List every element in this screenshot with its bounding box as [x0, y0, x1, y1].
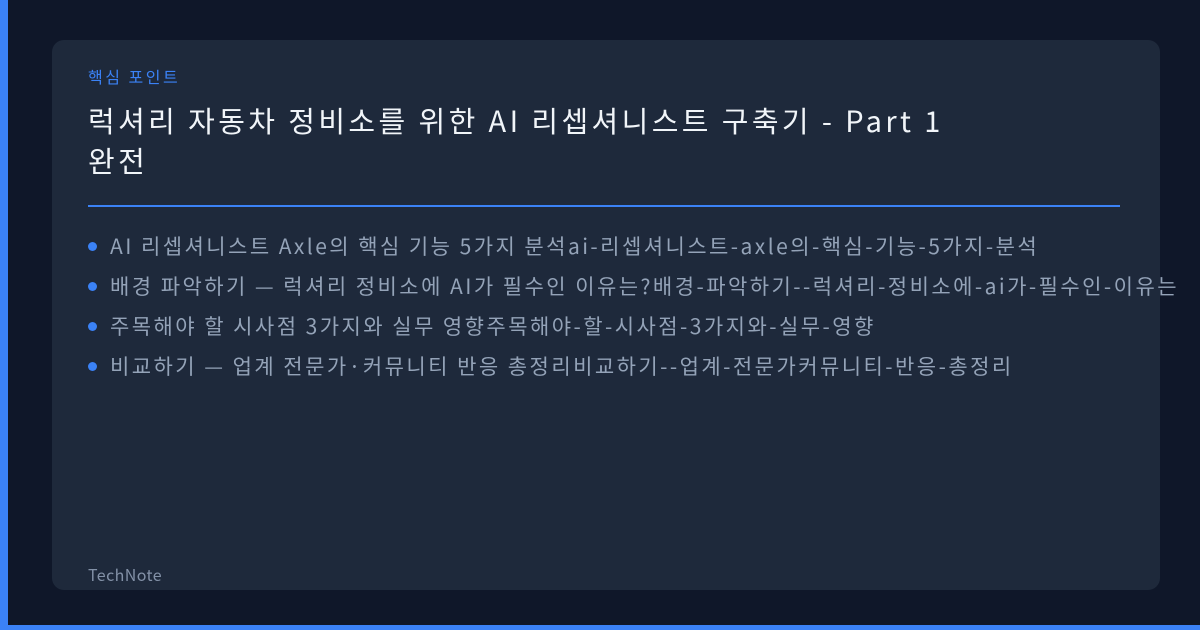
title: 완전 [88, 139, 148, 181]
bullet 1: AI 리셉셔니스트 Axle의 핵심 기능 5가지 분석ai-리셉셔니스트-axle의-핵심-기능-5가지-분석 [110, 231, 1039, 261]
bottom accent bar [0, 625, 1200, 630]
footer brand: TechNote [88, 562, 162, 586]
bullet 2: 배경 파악하기 — 럭셔리 정비소에 AI가 필수인 이유는?배경-파악하기--럭셔리-정비소에-ai가-필수인-이유는 [110, 271, 1179, 301]
bullet 4: 비교하기 — 업계 전문가·커뮤니티 반응 총정리비교하기--업계-전문가커뮤니티-반응-총정리 [110, 351, 1014, 381]
divider [88, 205, 1120, 207]
tag label: 핵심 포인트 [88, 64, 180, 88]
bullet list [88, 231, 1179, 381]
title: 럭셔리 자동차 정비소를 위한 AI 리셉셔니스트 구축기 - Part 1 [88, 99, 944, 141]
left accent bar [0, 0, 8, 630]
bullet 3: 주목해야 할 시사점 3가지와 실무 영향주목해야-할-시사점-3가지와-실무-영향 [110, 311, 876, 341]
title [88, 99, 944, 181]
